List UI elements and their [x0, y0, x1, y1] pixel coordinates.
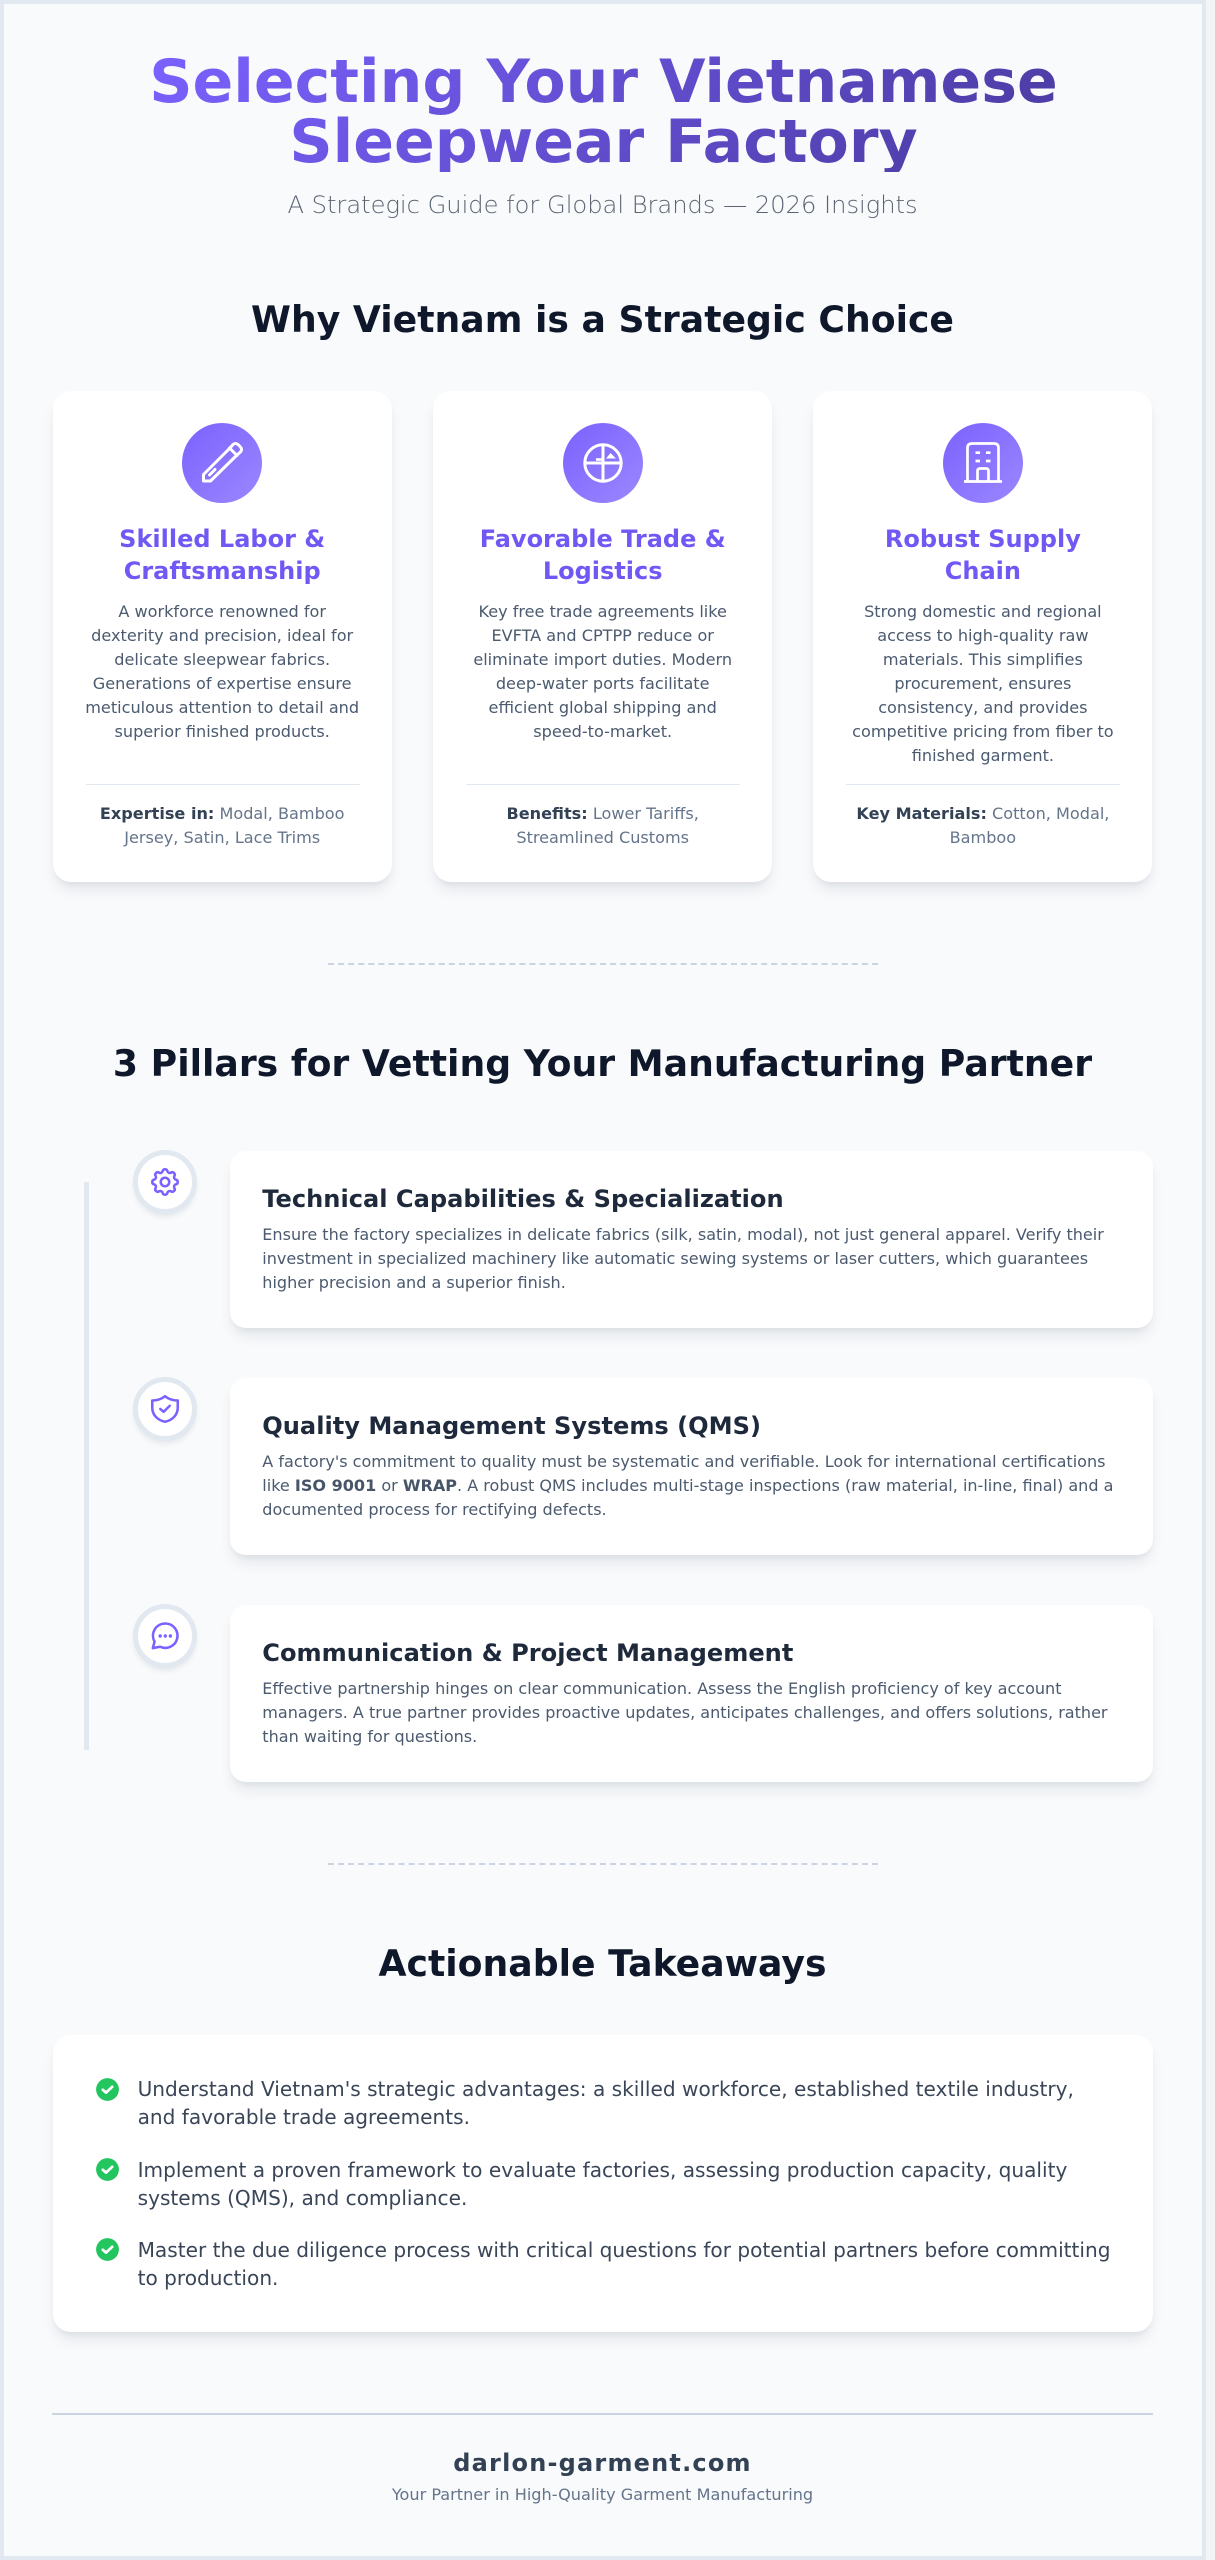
card description: dexterity and precision, ideal for [91, 626, 353, 645]
pillar description: like ISO 9001 or WRAP. A robust QMS includes multi-stage inspections (raw material, in-line, final) and a [262, 1476, 1113, 1495]
icon: gear [133, 1150, 197, 1214]
pillar description [262, 1225, 1104, 1292]
pillar description: documented process for rectifying defects. [262, 1500, 607, 1519]
panel: quality management [230, 1378, 1153, 1555]
panel: communication [230, 1605, 1153, 1782]
card footnote: Benefits: Lower Tariffs, [506, 804, 699, 822]
icon: shield check [133, 1377, 197, 1441]
card title: Craftsmanship [124, 557, 321, 585]
panel: takeaways [52, 2035, 1153, 2332]
title: Selecting Your Vietnamese [149, 47, 1058, 117]
icon: globe with ship [563, 423, 643, 503]
pillar title: Technical Capabilities & Specialization [262, 1185, 784, 1213]
takeaway 3 [138, 2238, 1110, 2290]
footer tagline: Your Partner in High-Quality Garment Manufacturing [392, 2485, 813, 2504]
card description: materials. This simplifies [883, 650, 1083, 669]
card title [480, 525, 726, 585]
takeaway 1: Understand Vietnam's strategic advantages: a skilled workforce, established textile industry, [138, 2077, 1074, 2101]
takeaway 3: Master the due diligence process with critical questions for potential partners before committing [138, 2238, 1110, 2262]
title: Sleepwear Factory [289, 107, 918, 177]
card title: Robust Supply [885, 525, 1081, 553]
takeaway 2 [138, 2158, 1067, 2210]
card title: Skilled Labor & [119, 525, 325, 553]
icon: chat bubble [133, 1604, 197, 1668]
card title: Chain [945, 557, 1021, 585]
card description: deep-water ports facilitate [496, 674, 710, 693]
pillar description [262, 1452, 1113, 1519]
panel: skilled labor card [53, 391, 392, 882]
icon: pencil [182, 423, 262, 503]
card footnote: Key Materials: Cotton, Modal, [856, 804, 1109, 822]
card description: meticulous attention to detail and [85, 698, 359, 717]
pillar description: managers. A true partner provides proactive updates, anticipates challenges, and offers solutions, rather [262, 1703, 1108, 1722]
card footnote [506, 804, 699, 847]
card description: finished garment. [912, 746, 1054, 765]
card footnote: Bamboo [950, 828, 1016, 847]
pillar description: higher precision and a superior finish. [262, 1273, 566, 1292]
pillar description: Ensure the factory specializes in delicate fabrics (silk, satin, modal), not just general apparel. Verify their [262, 1225, 1104, 1244]
card description: speed-to-market. [533, 722, 672, 741]
card description [85, 602, 359, 741]
takeaway 3: to production. [138, 2266, 278, 2290]
card description: EVFTA and CPTPP reduce or [491, 626, 714, 645]
card description: Generations of expertise ensure [93, 674, 352, 693]
pillar title: Communication & Project Management [262, 1639, 793, 1667]
title [149, 52, 1058, 172]
takeaway 1: and favorable trade agreements. [138, 2105, 470, 2129]
card footnote [100, 804, 344, 847]
panel: trade and logistics card [433, 391, 772, 882]
card description: Strong domestic and regional [864, 602, 1102, 620]
card footnote: Expertise in: Modal, Bamboo [100, 804, 344, 822]
pillar description: investment in specialized machinery like automatic sewing systems or laser cutters, which guarantees [262, 1249, 1088, 1268]
pillar description: Effective partnership hinges on clear communication. Assess the English proficiency of key account [262, 1679, 1062, 1698]
takeaway 2: systems (QMS), and compliance. [138, 2186, 467, 2210]
icon: check 3 [96, 2238, 119, 2261]
card title [885, 525, 1081, 585]
card description: eliminate import duties. Modern [473, 650, 732, 669]
pillar title: Quality Management Systems (QMS) [262, 1412, 761, 1440]
subtitle: A Strategic Guide for Global Brands — 2026 Insights [287, 191, 918, 219]
heading: why Vietnam: Why Vietnam is a Strategic Choice [251, 298, 954, 341]
card description [852, 602, 1114, 765]
pillar description: than waiting for questions. [262, 1727, 477, 1746]
card description: consistency, and provides [878, 698, 1088, 717]
card description: delicate sleepwear fabrics. [114, 650, 330, 669]
card footnote [856, 804, 1109, 847]
card description: procurement, ensures [894, 674, 1071, 693]
panel: technical capabilities [230, 1151, 1153, 1328]
pillar description [262, 1679, 1108, 1746]
card title: Logistics [543, 557, 663, 585]
takeaway 1 [138, 2077, 1074, 2129]
pillar description: A factory's commitment to quality must be systematic and verifiable. Look for international certifications [262, 1452, 1105, 1471]
card description: superior finished products. [114, 722, 330, 741]
card description: A workforce renowned for [118, 602, 326, 620]
card footnote: Streamlined Customs [516, 828, 689, 847]
card description: Key free trade agreements like [478, 602, 727, 620]
card description: competitive pricing from fiber to [852, 722, 1114, 741]
card description: access to high-quality raw [877, 626, 1089, 645]
card title [119, 525, 325, 585]
card description: efficient global shipping and [489, 698, 717, 717]
icon: building [943, 423, 1023, 503]
heading: pillars: 3 Pillars for Vetting Your Manufacturing Partner [113, 1042, 1092, 1085]
card description [473, 602, 732, 741]
icon: check 2 [96, 2158, 119, 2181]
takeaway 2: Implement a proven framework to evaluate factories, assessing production capacity, quality [138, 2158, 1067, 2182]
heading: takeaways: Actionable Takeaways [378, 1942, 826, 1985]
icon: check 1 [96, 2078, 119, 2101]
timeline line [84, 1182, 88, 1750]
card title: Favorable Trade & [480, 525, 726, 553]
footer brand: darlon-garment.com [453, 2449, 752, 2477]
card footnote: Jersey, Satin, Lace Trims [124, 828, 320, 847]
panel: supply chain card [813, 391, 1152, 882]
